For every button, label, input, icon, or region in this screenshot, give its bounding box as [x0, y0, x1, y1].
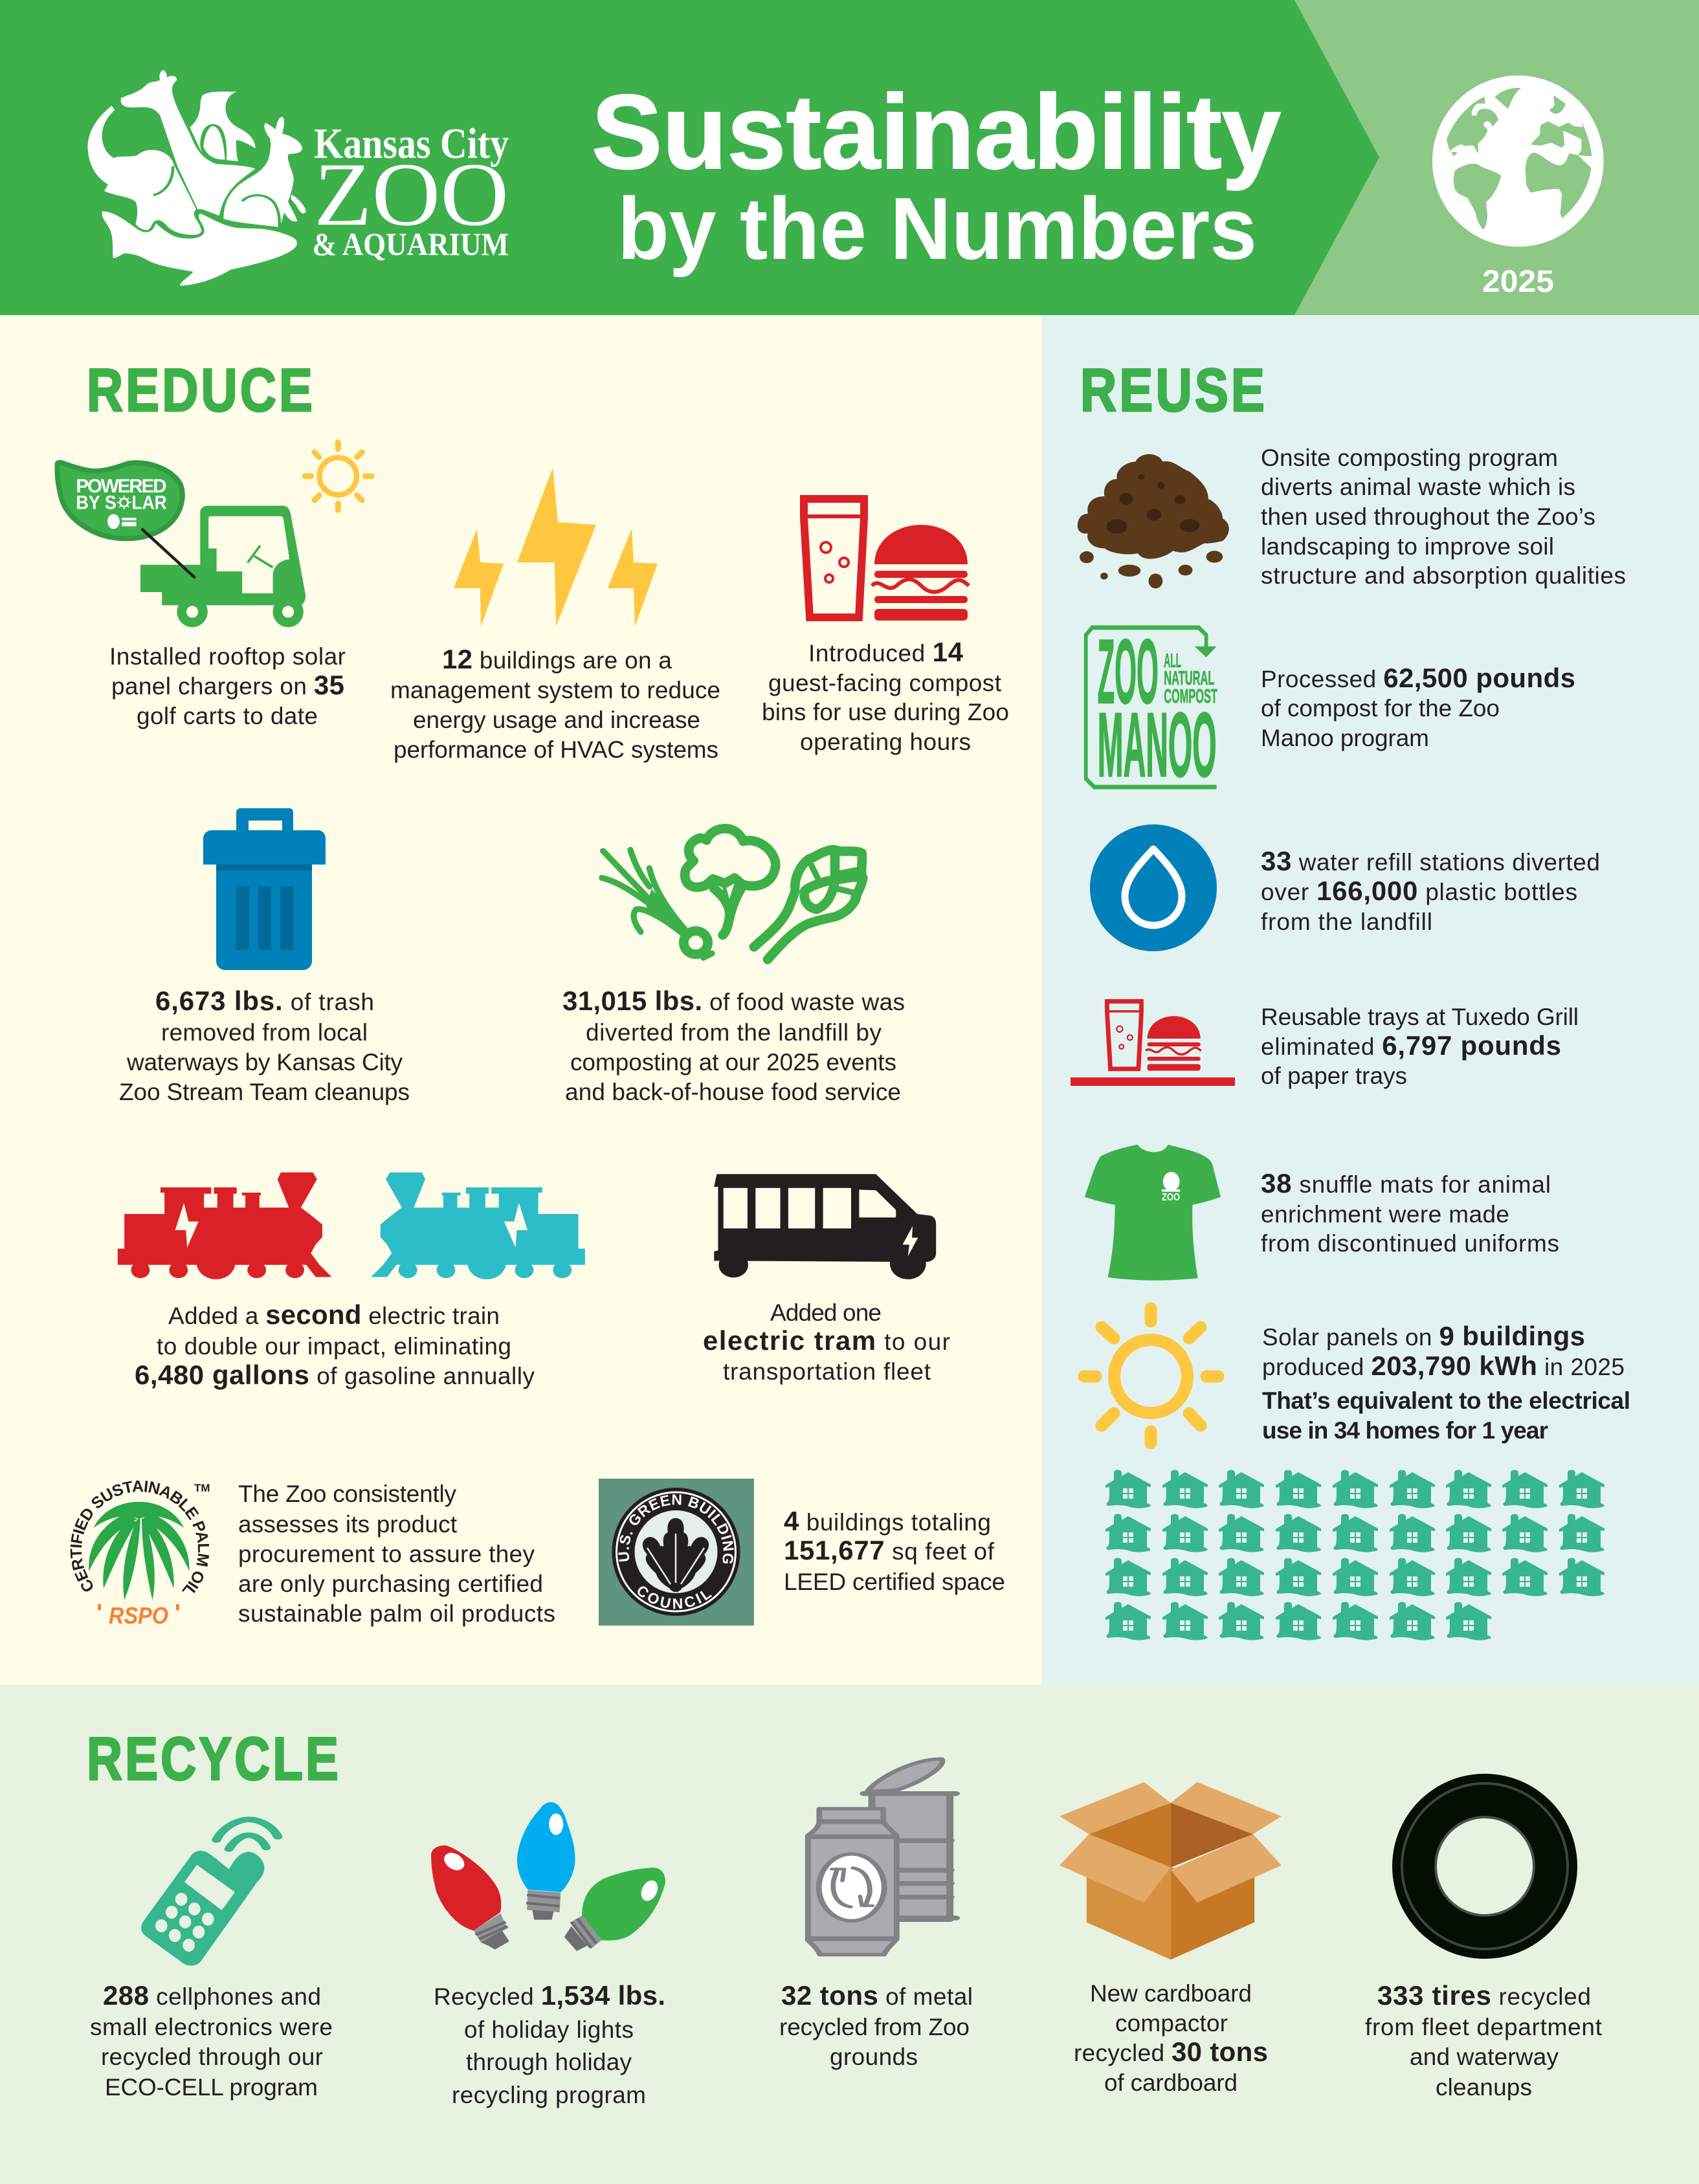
- icon: vegetables: [602, 828, 863, 960]
- logo: Kansas City Zoo & Aquarium: Kansas City: [314, 120, 509, 168]
- text: reusable trays: [1261, 1004, 1579, 1089]
- logo: U.S. Green Building Council: U.S. GREEN BUILDING: [618, 1494, 734, 1563]
- logo: Kansas City Zoo & Aquarium: ZOO: [314, 144, 509, 245]
- header banner: [0, 0, 1699, 315]
- title: Sustainability: [592, 72, 1281, 191]
- text: trash removed: Zoo Stream Team cleanups: [119, 1079, 410, 1105]
- text: compost bins: Introduced 14: [808, 637, 964, 667]
- panel: recycle: [0, 1684, 1699, 2184]
- text: water stations: [1261, 846, 1600, 935]
- icon: cardboard box: [1060, 1782, 1282, 1959]
- text: cellphones: small electronics were: [90, 2014, 333, 2040]
- icon: tire: [1392, 1774, 1577, 1959]
- text: electric train: to double our impact, eliminating: [157, 1333, 511, 1360]
- text: electric tram: Added one: [770, 1299, 882, 1326]
- text: holiday lights: recycling program: [452, 2082, 646, 2108]
- text: electric train: Added a second electric train: [168, 1299, 500, 1330]
- text: buildings management: management system to reduce: [390, 677, 720, 703]
- heading: recycle: RECYCLE: [87, 1725, 341, 1792]
- text: water stations: over 166,000 plastic bottles: [1261, 876, 1577, 906]
- text: palm oil: are only purchasing certified: [238, 1571, 543, 1597]
- text: golf carts: Installed rooftop solar: [109, 643, 346, 670]
- logo: RSPO certified sustainable palm oil: RSPO: [109, 1602, 168, 1629]
- text: composting program: Onsite composting program: [1261, 445, 1558, 471]
- text: golf carts: [109, 643, 346, 729]
- text: electric train: 6,480 gallons of gasoline annually: [135, 1360, 535, 1390]
- title: [592, 72, 1281, 278]
- icon: electric tram: [714, 1174, 936, 1279]
- text: palm oil: The Zoo consistently: [238, 1481, 457, 1507]
- text: cardboard: New cardboard: [1090, 1980, 1252, 2007]
- icon: red and blue trains: [118, 1173, 585, 1279]
- text: palm oil: procurement to assure they: [238, 1541, 535, 1567]
- text: palm oil: [238, 1481, 555, 1627]
- text: reusable trays: of paper trays: [1261, 1063, 1407, 1089]
- text: holiday lights: through holiday: [466, 2049, 632, 2075]
- text: compost bins: guest-facing compost: [768, 670, 1002, 696]
- text: compost bins: [762, 637, 1009, 755]
- text: compost bins: operating hours: [800, 729, 971, 755]
- blue train: [371, 1173, 585, 1279]
- logo: RSPO certified sustainable palm oil: TM: [194, 1482, 210, 1494]
- text: electric tram: [703, 1299, 950, 1385]
- icon: cellphone: [141, 1820, 278, 1966]
- icon: metal cans: [808, 1759, 956, 1955]
- text: electric train: [135, 1299, 535, 1390]
- panel: reuse: [1042, 315, 1699, 1684]
- text: cellphones: ECO-CELL program: [105, 2074, 318, 2101]
- year: 2025: [1482, 265, 1554, 299]
- text: cellphones: [90, 1980, 333, 2101]
- text: composting program: structure and absorption qualities: [1261, 562, 1626, 589]
- text: solar panels: Solar panels on 9 buildings: [1262, 1321, 1585, 1351]
- text: zoo manoo: [1261, 663, 1575, 751]
- icon: t-shirt: [1085, 1145, 1221, 1281]
- text: metal: [779, 1980, 973, 2070]
- text: food waste: [562, 986, 905, 1105]
- logo: Kansas City Zoo & Aquarium: SM: [124, 256, 134, 262]
- logo: U.S. Green Building Council: [599, 1479, 754, 1626]
- text: holiday lights: of holiday lights: [464, 2016, 634, 2043]
- text: snuffle mats: from discontinued uniforms: [1261, 1230, 1559, 1257]
- text: snuffle mats: enrichment were made: [1261, 1201, 1509, 1228]
- panel: reuse: MANOO: [1098, 693, 1217, 796]
- text: holiday lights: Recycled 1,534 lbs.: [434, 1980, 665, 2011]
- text: food waste: composting at our 2025 events: [570, 1049, 896, 1075]
- red train: [118, 1173, 331, 1279]
- text: water stations: 33 water refill stations diverted: [1261, 846, 1600, 876]
- text: trash removed: 6,673 lbs. of trash: [155, 986, 374, 1016]
- heading: reuse: REUSE: [1080, 356, 1267, 424]
- icon: t-shirt: ZOO: [1162, 1191, 1180, 1203]
- logo: Zoo Manoo compost: ZOO: [1098, 620, 1159, 722]
- logo: Kansas City Zoo & Aquarium: [88, 70, 509, 286]
- icon: solar golf cart: POWERED: [76, 476, 167, 497]
- logo: Zoo Manoo compost: COMPOST: [1164, 685, 1217, 707]
- text: holiday lights: [434, 1980, 665, 2108]
- text: solar panels: [1262, 1321, 1630, 1444]
- text: cardboard: [1074, 1980, 1268, 2096]
- text: cardboard: recycled 30 tons: [1074, 2036, 1268, 2067]
- text: palm oil: assesses its product: [238, 1511, 458, 1538]
- text: reusable trays: eliminated 6,797 pounds: [1261, 1030, 1561, 1061]
- text: snuffle mats: [1261, 1168, 1559, 1257]
- logo: Kansas City Zoo & Aquarium: & AQUARIUM: [312, 226, 509, 262]
- icon: sun: [1084, 1308, 1218, 1443]
- text: cellphones: recycled through our: [101, 2044, 323, 2070]
- icon: cup and burger: [804, 499, 969, 621]
- icon: globe: [1432, 76, 1604, 247]
- text: buildings management: [390, 644, 720, 763]
- text: snuffle mats: 38 snuffle mats for animal: [1261, 1168, 1551, 1198]
- text: trash removed: removed from local: [161, 1019, 368, 1046]
- text: cardboard: of cardboard: [1104, 2069, 1238, 2096]
- text: palm oil: sustainable palm oil products: [238, 1600, 555, 1627]
- text: electric tram: transportation fleet: [723, 1358, 931, 1385]
- text: LEED buildings: 4 buildings totaling: [784, 1506, 991, 1536]
- text: zoo manoo: of compost for the Zoo: [1261, 695, 1500, 722]
- text: composting program: diverts animal waste which is: [1261, 474, 1575, 500]
- text: electric tram: electric tram to our: [703, 1325, 950, 1356]
- text: composting program: landscaping to improve soil: [1261, 533, 1554, 560]
- text: cardboard: compactor: [1115, 2010, 1228, 2036]
- text: LEED buildings: LEED certified space: [784, 1569, 1005, 1595]
- icon: water drop: [1090, 824, 1217, 951]
- title: by the Numbers: [617, 179, 1257, 278]
- text: water stations: from the landfill: [1261, 909, 1432, 935]
- text: buildings management: 12 buildings are on a: [442, 644, 672, 674]
- text: reusable trays: Reusable trays at Tuxedo Grill: [1261, 1004, 1579, 1030]
- text: food waste: diverted from the landfill by: [586, 1019, 882, 1046]
- text: food waste: 31,015 lbs. of food waste was: [562, 986, 905, 1016]
- text: trash removed: [119, 986, 410, 1105]
- logo: U.S. Green Building Council: COUNCIL: [638, 1586, 712, 1609]
- text: food waste: and back-of-house food service: [565, 1079, 901, 1105]
- text: buildings management: energy usage and increase: [413, 707, 700, 733]
- heading: reduce: REDUCE: [87, 356, 315, 424]
- text: LEED buildings: 151,677 sq feet of: [784, 1535, 995, 1565]
- text: solar panels: use in 34 homes for 1 year: [1262, 1417, 1548, 1444]
- icon: lightning bolts: [454, 468, 658, 626]
- text: solar panels: produced 203,790 kWh in 2025: [1262, 1351, 1625, 1381]
- icon: trash can: [203, 808, 326, 970]
- icon: solar golf cart: [57, 443, 372, 627]
- logo: Zoo Manoo compost: [1086, 620, 1217, 796]
- icon: solar golf cart: BY S: [76, 492, 117, 514]
- text: LEED buildings: [784, 1506, 1005, 1595]
- icon: compost pile: [1078, 454, 1229, 588]
- text: metal: recycled from Zoo: [779, 2014, 970, 2040]
- icon grid: 34 homes: [1105, 1470, 1605, 1640]
- text: zoo manoo: Manoo program: [1261, 725, 1429, 751]
- panel: reduce: [0, 315, 1042, 1684]
- text: solar panels: That’s equivalent to the electrical: [1262, 1387, 1630, 1414]
- text: buildings management: performance of HVAC systems: [394, 736, 718, 763]
- text: composting program: then used throughout the Zoo’s: [1261, 503, 1595, 530]
- text: golf carts: golf carts to date: [137, 703, 318, 729]
- text: tires: from fleet department: [1365, 2014, 1603, 2040]
- text: metal: grounds: [830, 2044, 918, 2070]
- icon: holiday light bulbs: [431, 1802, 665, 1951]
- text: tires: and waterway: [1410, 2044, 1559, 2070]
- text: metal: 32 tons of metal: [781, 1980, 973, 2011]
- text: golf carts: panel chargers on 35: [111, 670, 344, 700]
- icon: tray with meal: [1071, 1001, 1235, 1086]
- text: tires: [1365, 1980, 1603, 2101]
- logo: Zoo Manoo compost: ALL: [1164, 649, 1181, 672]
- text: zoo manoo: Processed 62,500 pounds: [1261, 663, 1575, 693]
- text: cellphones: 288 cellphones and: [103, 1980, 321, 2011]
- text: trash removed: waterways by Kansas City: [126, 1049, 403, 1075]
- icon: solar golf cart: LAR: [132, 492, 167, 514]
- logo: Zoo Manoo compost: NATURAL: [1164, 667, 1214, 689]
- text: tires: cleanups: [1436, 2074, 1532, 2101]
- text: compost bins: bins for use during Zoo: [762, 699, 1009, 725]
- text: composting program: [1261, 445, 1626, 589]
- text: tires: 333 tires recycled: [1377, 1980, 1591, 2011]
- logo: RSPO certified sustainable palm oil: CERTIFIED SUSTAINABLE PALM OIL: [70, 1481, 210, 1593]
